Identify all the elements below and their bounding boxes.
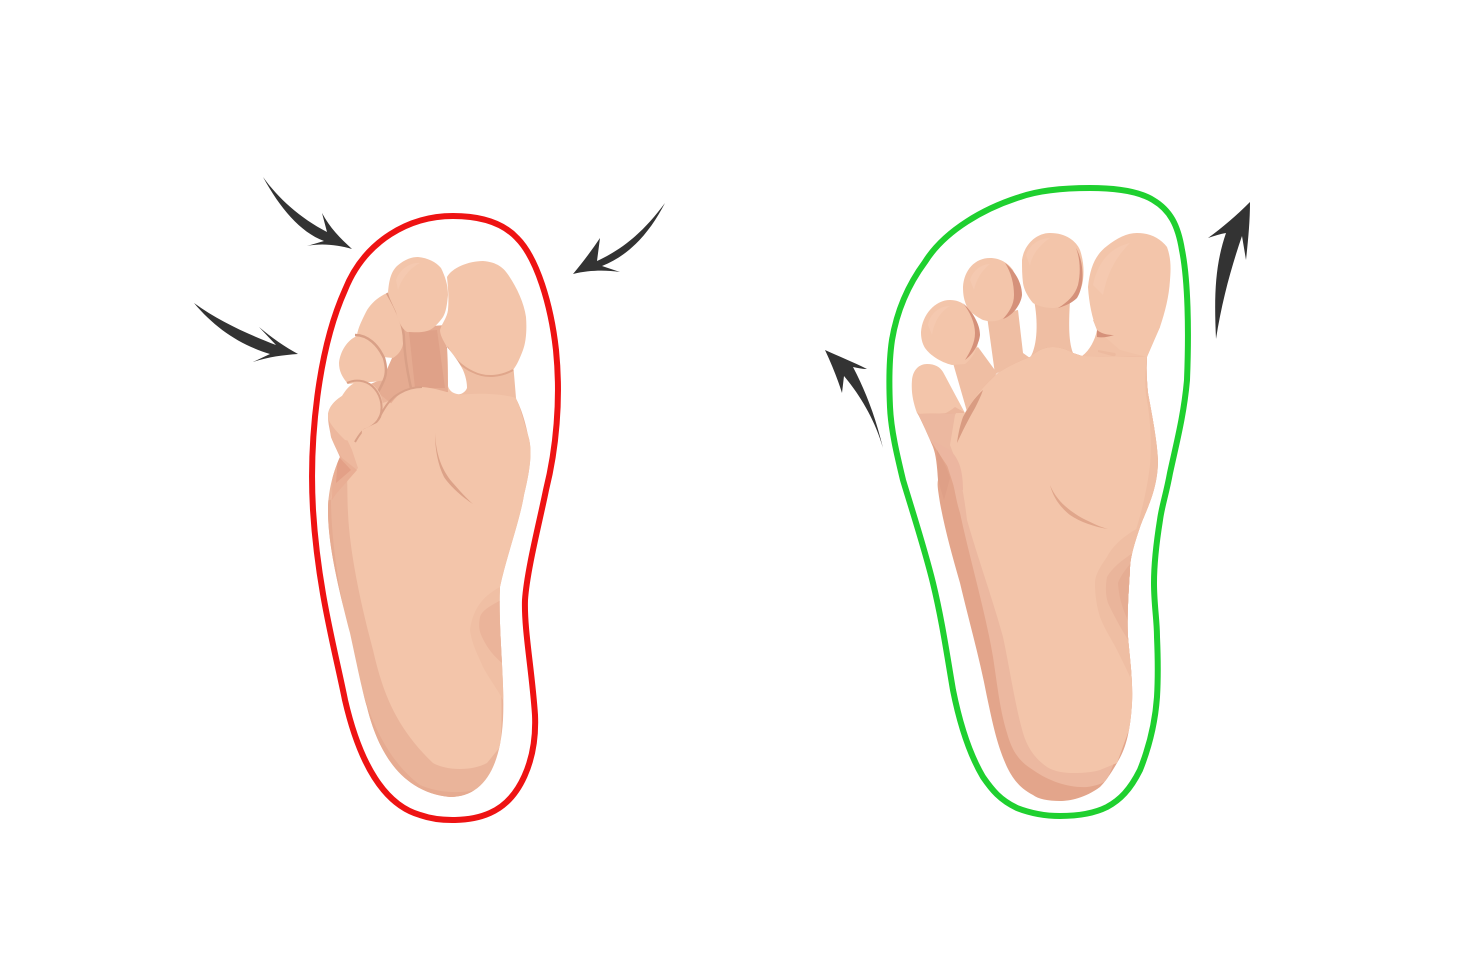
right foot big toe mark <box>1097 330 1114 337</box>
right foot second toe <box>1022 233 1084 308</box>
left foot toe highlight <box>396 263 420 290</box>
left foot arch shade <box>500 590 504 700</box>
illustration: foot in narrow vs wide shoe outline <box>194 177 1250 823</box>
right foot toe highlights <box>928 238 1130 335</box>
left foot crease <box>435 433 473 504</box>
left foot little toe <box>328 381 383 442</box>
left foot fourth toe line <box>355 335 386 392</box>
left foot crossed middle section <box>409 330 445 388</box>
right foot third toe stem <box>987 310 1030 374</box>
left foot big toe <box>440 261 526 377</box>
right foot side notch <box>948 454 963 490</box>
arrow: top right <box>573 203 665 274</box>
left foot ball line <box>378 387 422 420</box>
right foot second toe crescent <box>1058 248 1083 308</box>
left foot toe gap <box>447 347 467 394</box>
right foot second toe stem <box>1030 300 1082 358</box>
left foot second toe <box>388 257 448 332</box>
left foot third toe line <box>387 293 411 388</box>
left foot big toe neck <box>447 347 516 398</box>
right foot sole <box>918 352 1158 801</box>
left foot sole <box>328 347 530 797</box>
left foot third toe <box>357 293 403 358</box>
right foot fourth toe crescent <box>963 303 980 360</box>
arrow: middle left <box>194 303 298 362</box>
red outline: tight shoe <box>312 216 558 820</box>
green outline: roomy shoe <box>889 188 1188 816</box>
left foot little toe line <box>347 381 382 442</box>
left foot toe web shadows <box>377 325 448 404</box>
right foot fourth toe <box>921 300 978 365</box>
right foot little toe <box>912 364 965 447</box>
left foot big toe crease <box>447 347 513 376</box>
arrow: top left <box>263 177 352 249</box>
arrow: right foot left <box>825 350 883 448</box>
right foot crease <box>1050 485 1108 529</box>
right foot right edge shade <box>1140 365 1158 526</box>
right foot arch shade <box>1128 531 1139 671</box>
arrow: right foot right <box>1208 202 1250 339</box>
right foot third toe crescent <box>1003 263 1022 319</box>
right foot big toe <box>1088 233 1171 357</box>
left foot ball of foot <box>360 387 530 460</box>
right foot: roomy <box>910 233 1171 810</box>
left foot side notch shade <box>328 406 358 470</box>
right foot big toe neck <box>1082 320 1160 395</box>
right foot third toe <box>963 258 1018 321</box>
right foot big toe neck line <box>1098 350 1116 356</box>
right foot little toe joint <box>917 407 964 448</box>
right foot toe to sole line <box>957 390 983 443</box>
right foot fourth toe stem <box>953 347 997 415</box>
left foot: cramped <box>320 257 540 805</box>
left foot fourth toe <box>339 336 385 384</box>
